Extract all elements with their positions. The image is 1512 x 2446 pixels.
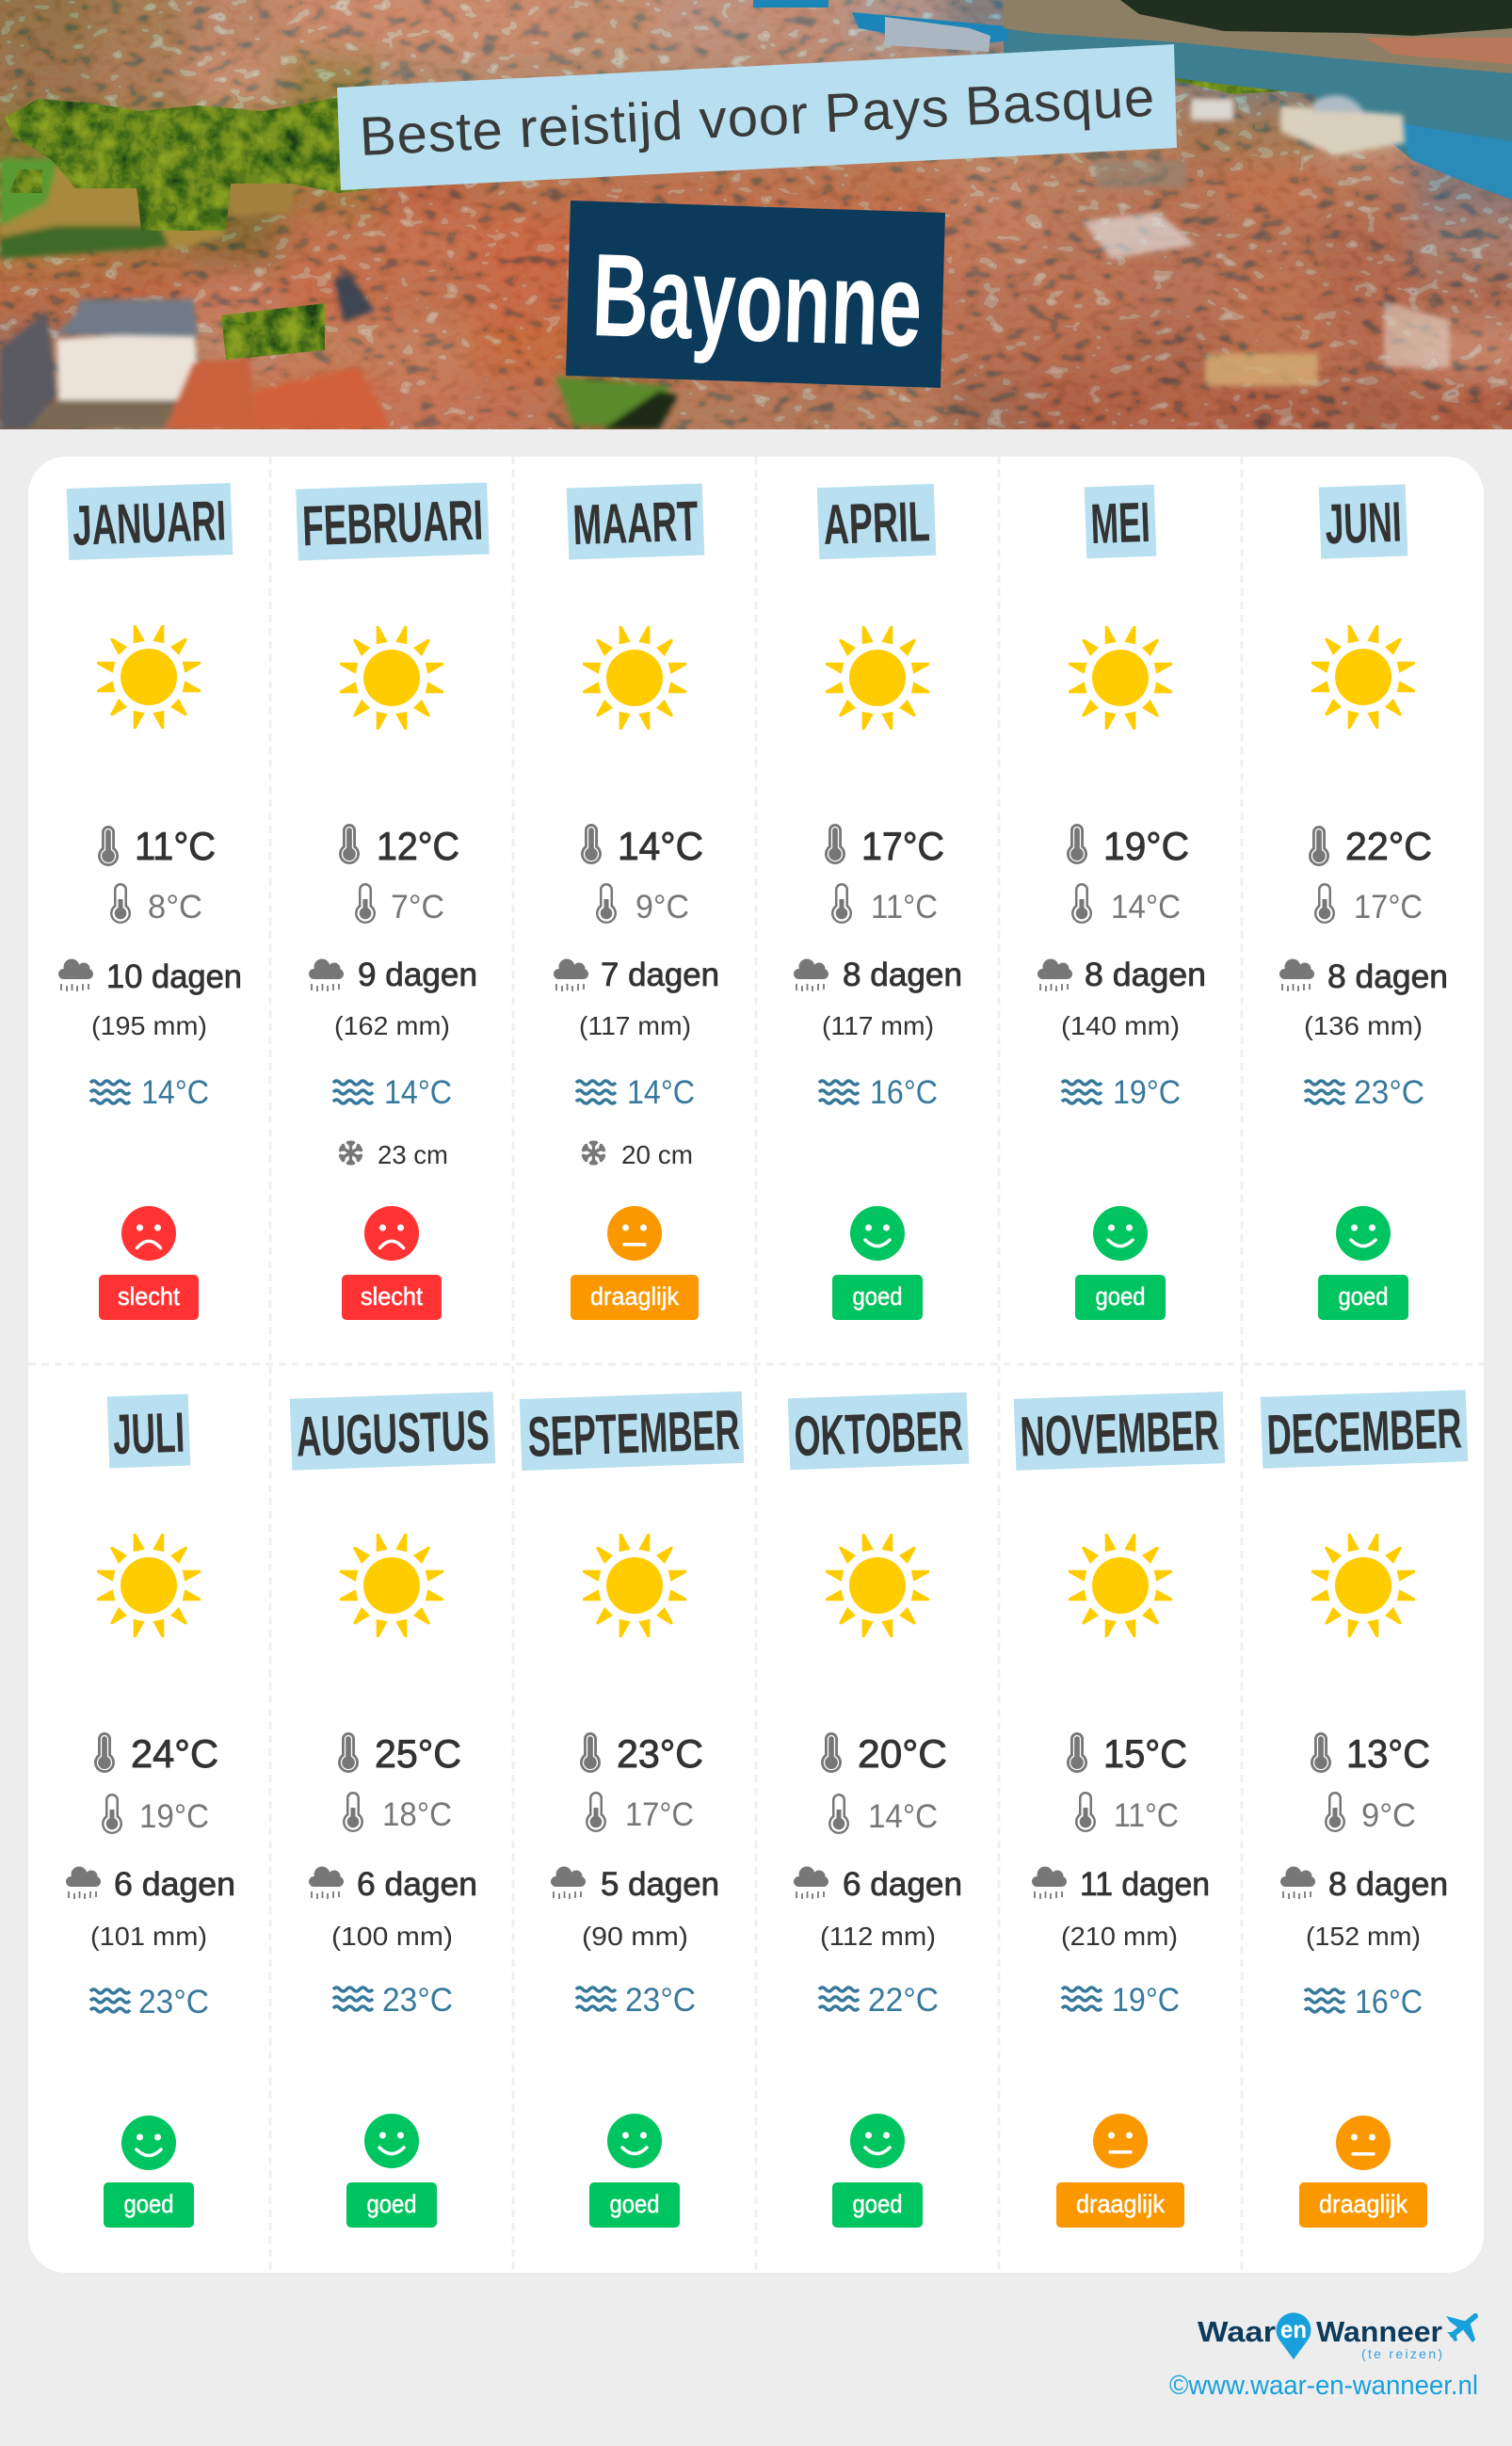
far bank and hill <box>1004 0 1512 73</box>
max temperature: 19°C <box>1103 824 1189 868</box>
title banner <box>337 44 1177 190</box>
heading oktober: OKTOBER <box>793 1399 964 1468</box>
heading november <box>1014 1392 1225 1471</box>
min temperature <box>355 883 444 925</box>
sea temperature <box>819 1982 939 2019</box>
rain days: 9 dagen <box>358 957 477 993</box>
icon: sun <box>1069 626 1172 730</box>
max temperature <box>825 824 944 868</box>
sea temperature: 23°C <box>382 1982 453 2019</box>
month: januari <box>58 483 242 1320</box>
logo: Waar en Wanneer: Wanneer <box>1316 2315 1442 2348</box>
rating: draaglijk: draaglijk <box>590 1282 679 1311</box>
min temperature <box>586 1792 694 1833</box>
rain days: 8 dagen <box>1327 958 1448 995</box>
rating: draaglijk <box>571 1206 699 1320</box>
month: juni <box>1279 484 1448 1320</box>
rainfall: (162 mm) <box>334 1011 450 1040</box>
sea temperature <box>90 1074 209 1111</box>
logo: Waar en Wanneer: en <box>1280 2315 1307 2343</box>
icon: airplane <box>1446 2316 1475 2342</box>
heading april <box>817 484 936 559</box>
max temperature: 15°C <box>1103 1731 1187 1776</box>
sea temperature: 19°C <box>1113 1074 1181 1111</box>
min temperature: 9°C <box>635 889 689 925</box>
month: september <box>520 1392 744 2228</box>
max temperature <box>98 824 216 868</box>
rating: goed: goed <box>1096 1282 1145 1311</box>
heading september: SEPTEMBER <box>526 1398 741 1469</box>
title banner: Beste reistijd voor Pays Basque <box>358 67 1156 168</box>
rating: goed <box>1075 1206 1166 1320</box>
icon: sun <box>583 1534 686 1637</box>
snow depth <box>581 1140 693 1169</box>
min temperature <box>828 1794 938 1835</box>
rain days: 6 dagen <box>114 1866 235 1903</box>
sea temperature <box>333 1074 452 1111</box>
heading oktober <box>788 1392 969 1470</box>
rain days: 8 dagen <box>843 957 962 993</box>
card panel <box>28 457 1484 2273</box>
min temperature <box>831 883 938 925</box>
heading juli <box>107 1394 190 1468</box>
rainfall: (117 mm) <box>579 1011 691 1040</box>
sea temperature: 16°C <box>1355 1984 1423 2020</box>
min temperature: 17°C <box>625 1796 694 1833</box>
heading februari <box>296 482 490 561</box>
rainfall: (100 mm) <box>331 1922 453 1951</box>
river <box>753 0 1512 200</box>
sea temperature <box>333 1982 453 2019</box>
rain days: 5 dagen <box>601 1866 719 1903</box>
sea temperature <box>819 1074 938 1111</box>
max temperature: 12°C <box>377 824 459 868</box>
tree canopy <box>5 55 1313 360</box>
heading juni <box>1319 484 1407 559</box>
max temperature <box>339 824 459 868</box>
rain days: 8 dagen <box>1085 957 1206 993</box>
rain days: 8 dagen <box>1328 1866 1448 1903</box>
max temperature: 22°C <box>1345 824 1432 868</box>
max temperature: 23°C <box>617 1731 703 1776</box>
city name banner <box>566 201 945 388</box>
sea temperature <box>1062 1982 1180 2019</box>
sea temperature: 19°C <box>1112 1982 1180 2019</box>
sea temperature: 23°C <box>138 1984 209 2020</box>
rainfall: (90 mm) <box>582 1922 688 1951</box>
rating: goed: goed <box>367 2190 416 2218</box>
heading maart <box>567 484 704 559</box>
sea temperature: 23°C <box>625 1982 696 2019</box>
heading januari: JANUARI <box>72 489 227 557</box>
sea temperature <box>90 1984 209 2020</box>
icon: sun <box>1069 1534 1172 1637</box>
rainfall: (117 mm) <box>822 1011 934 1040</box>
min temperature: 18°C <box>382 1796 452 1833</box>
min temperature <box>343 1792 452 1833</box>
rating: goed <box>832 1206 923 1320</box>
sea temperature: 14°C <box>384 1074 452 1111</box>
rating: slecht: slecht <box>361 1282 423 1311</box>
rain days: 11 dagen <box>1080 1866 1210 1903</box>
sea temperature <box>1305 1074 1424 1111</box>
snow depth <box>338 1140 448 1169</box>
icon: sun <box>826 626 929 730</box>
rain days: 7 dagen <box>601 957 719 993</box>
heading augustus <box>290 1392 495 1471</box>
rating: draaglijk: draaglijk <box>1319 2190 1407 2218</box>
rainfall: (112 mm) <box>820 1922 936 1951</box>
sea temperature: 16°C <box>870 1074 938 1111</box>
icon: sun <box>1311 625 1415 729</box>
sea temperature: 22°C <box>868 1982 939 2019</box>
min temperature <box>1075 1792 1179 1834</box>
heading mei <box>1085 485 1156 558</box>
max temperature <box>1067 824 1189 868</box>
heading mei: MEI <box>1089 491 1151 555</box>
rating: slecht <box>342 1206 442 1320</box>
month: augustus <box>290 1392 495 2228</box>
month: december <box>1261 1390 1468 2228</box>
sea temperature <box>1305 1984 1423 2020</box>
max temperature <box>581 824 703 868</box>
heading juli: JULI <box>112 1401 185 1466</box>
snow depth: 20 cm <box>621 1140 693 1169</box>
rating: slecht: slecht <box>118 1282 180 1311</box>
max temperature <box>1311 1731 1430 1776</box>
max temperature: 24°C <box>131 1731 218 1776</box>
rain days: 6 dagen <box>843 1866 962 1903</box>
min temperature: 7°C <box>391 889 444 925</box>
heading november: NOVEMBER <box>1019 1398 1220 1469</box>
max temperature: 14°C <box>618 824 703 868</box>
rating: draaglijk <box>1056 2114 1184 2228</box>
max temperature <box>338 1731 461 1776</box>
max temperature: 17°C <box>861 824 944 868</box>
rainfall: (210 mm) <box>1061 1922 1178 1951</box>
icon: sun <box>97 1534 201 1637</box>
min temperature <box>1314 883 1423 925</box>
min temperature: 11°C <box>1114 1797 1179 1834</box>
rating: goed: goed <box>853 2190 902 2218</box>
rating: draaglijk: draaglijk <box>1076 2190 1165 2218</box>
rating: goed <box>832 2114 923 2228</box>
logo: Waar en Wanneer <box>1198 2312 1475 2361</box>
min temperature <box>110 883 202 925</box>
heading juni: JUNI <box>1324 491 1403 555</box>
month: april <box>794 484 962 1320</box>
month: maart <box>554 484 719 1320</box>
rating: goed: goed <box>610 2190 659 2218</box>
heading februari: FEBRUARI <box>301 489 484 557</box>
logo: Waar en Wanneer: (te reizen) <box>1361 2346 1442 2361</box>
sea temperature <box>1062 1074 1181 1111</box>
month: juli <box>66 1394 235 2228</box>
month: februari <box>296 482 490 1320</box>
snow depth: 23 cm <box>378 1140 448 1169</box>
logo: Waar en Wanneer: Waar <box>1198 2315 1276 2348</box>
rating: slecht <box>99 1206 199 1320</box>
rating: draaglijk <box>1299 2116 1427 2228</box>
rating: goed: goed <box>124 2190 173 2218</box>
sea temperature <box>576 1074 695 1111</box>
rain days: 10 dagen <box>106 958 242 995</box>
website url: ©www.waar-en-wanneer.nl <box>1169 2371 1478 2401</box>
icon: sun <box>826 1534 929 1637</box>
min temperature <box>102 1794 209 1835</box>
min temperature: 14°C <box>1111 889 1181 925</box>
max temperature: 20°C <box>858 1731 947 1776</box>
sea temperature <box>576 1982 696 2019</box>
heading september <box>520 1392 744 1471</box>
rainfall: (152 mm) <box>1306 1922 1421 1951</box>
month: november <box>1014 1392 1225 2228</box>
city name banner: Bayonne <box>590 230 925 372</box>
month: mei <box>1037 485 1206 1320</box>
rating: goed: goed <box>1339 1282 1388 1311</box>
max temperature <box>580 1731 703 1776</box>
apartment block at the river <box>885 17 990 52</box>
month: oktober <box>788 1392 969 2228</box>
sea temperature: 23°C <box>1354 1074 1424 1111</box>
min temperature: 14°C <box>868 1798 938 1835</box>
min temperature: 11°C <box>871 889 938 925</box>
rainfall: (136 mm) <box>1304 1011 1423 1040</box>
max temperature: 11°C <box>135 824 216 868</box>
min temperature: 9°C <box>1361 1797 1416 1834</box>
max temperature: 25°C <box>375 1731 461 1776</box>
icon: sun <box>97 625 201 729</box>
min temperature <box>1325 1792 1416 1834</box>
min temperature <box>1071 883 1181 925</box>
min temperature <box>596 883 689 925</box>
max temperature <box>1309 824 1432 868</box>
max temperature: 13°C <box>1346 1731 1430 1776</box>
heading augustus: AUGUSTUS <box>295 1398 491 1469</box>
rainfall: (140 mm) <box>1061 1011 1180 1040</box>
rating: goed <box>589 2114 680 2228</box>
heading maart: MAART <box>571 490 700 556</box>
sea temperature: 14°C <box>627 1074 695 1111</box>
min temperature: 17°C <box>1354 889 1423 925</box>
rainfall: (101 mm) <box>90 1922 207 1951</box>
rating: goed <box>1318 1206 1408 1320</box>
heading april: APRIL <box>822 490 931 556</box>
icon: sun <box>1311 1534 1415 1637</box>
min temperature: 8°C <box>148 889 202 925</box>
palace and dome <box>1191 95 1405 155</box>
rain days: 6 dagen <box>357 1866 477 1903</box>
header photo: aerial view of Bayonne <box>0 0 1512 429</box>
max temperature <box>1067 1731 1187 1776</box>
icon: sun <box>583 626 686 730</box>
sea temperature: 14°C <box>141 1074 209 1111</box>
icon: sun <box>340 626 443 730</box>
icon: location pin <box>1277 2312 1311 2359</box>
icon: sun <box>340 1534 443 1637</box>
heading januari <box>67 483 233 560</box>
min temperature: 19°C <box>139 1798 209 1835</box>
rainfall: (195 mm) <box>91 1011 207 1040</box>
rating: goed <box>346 2114 437 2228</box>
rating: goed: goed <box>853 1282 902 1311</box>
rating: goed <box>104 2116 194 2228</box>
